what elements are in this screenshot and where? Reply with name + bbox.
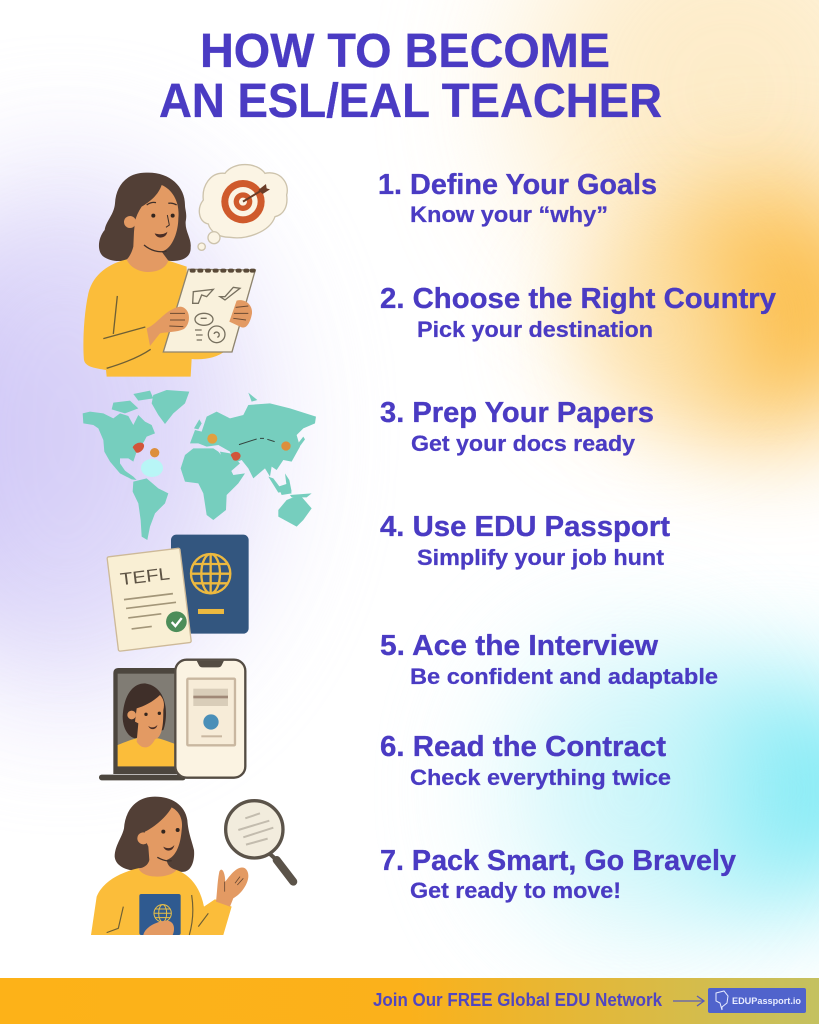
magnifying glass bbox=[226, 801, 293, 882]
title: HOW TO BECOME bbox=[200, 25, 610, 78]
step 1 text bbox=[378, 169, 657, 227]
phone bbox=[175, 660, 245, 778]
step 7 text: 7. Pack Smart, Go Bravely bbox=[380, 845, 736, 877]
step 2 text bbox=[380, 283, 776, 342]
arrow bbox=[673, 996, 704, 1006]
call to action text: Join Our FREE Global EDU Network bbox=[373, 990, 663, 1010]
step 3 text bbox=[380, 397, 654, 456]
map markers bbox=[133, 434, 291, 477]
step 6 text: Check everything twice bbox=[410, 765, 671, 790]
step 3 text: Get your docs ready bbox=[411, 431, 636, 456]
step 4 text: Simplify your job hunt bbox=[417, 545, 665, 570]
passport bbox=[171, 535, 249, 634]
title bbox=[159, 25, 662, 128]
step 7 text bbox=[380, 845, 736, 903]
step 4 text: 4. Use EDU Passport bbox=[380, 511, 670, 543]
step 7 text: Get ready to move! bbox=[410, 878, 621, 903]
step 5 text: 5. Ace the Interview bbox=[380, 630, 658, 662]
illustration: world map with pins bbox=[83, 390, 316, 540]
logo button bbox=[708, 988, 806, 1013]
title: AN ESL/EAL TEACHER bbox=[159, 75, 662, 128]
step 4 text bbox=[380, 511, 670, 570]
TEFL certificate: TEFL bbox=[119, 563, 171, 589]
illustration: passport and TEFL certificate bbox=[107, 535, 249, 651]
footer bar bbox=[0, 978, 819, 1024]
step 5 text bbox=[380, 630, 718, 689]
woman bbox=[91, 797, 248, 935]
step 2 text: Pick your destination bbox=[417, 317, 653, 342]
hands bbox=[147, 300, 252, 346]
step 1 text: Know your “why” bbox=[410, 202, 608, 227]
notepad bbox=[163, 269, 255, 352]
step 3 text: 3. Prep Your Papers bbox=[380, 397, 654, 429]
step 5 text: Be confident and adaptable bbox=[410, 664, 718, 689]
illustration: woman with passport and magnifying glass bbox=[91, 797, 293, 935]
illustration: laptop video call and phone bbox=[99, 660, 245, 780]
icon: thought bubble with target bbox=[198, 165, 287, 250]
step 6 text: 6. Read the Contract bbox=[380, 731, 666, 763]
step 6 text bbox=[380, 731, 671, 790]
logo button: EDUPassport.io bbox=[732, 996, 801, 1007]
step 1 text: 1. Define Your Goals bbox=[378, 169, 657, 201]
TEFL certificate bbox=[107, 548, 191, 651]
continents bbox=[83, 390, 316, 540]
laptop bbox=[99, 668, 186, 780]
passport held bbox=[139, 894, 181, 935]
step 2 text: 2. Choose the Right Country bbox=[380, 283, 776, 315]
woman figure bbox=[83, 173, 227, 377]
illustration: woman with notepad and target thought bubble bbox=[83, 165, 287, 377]
